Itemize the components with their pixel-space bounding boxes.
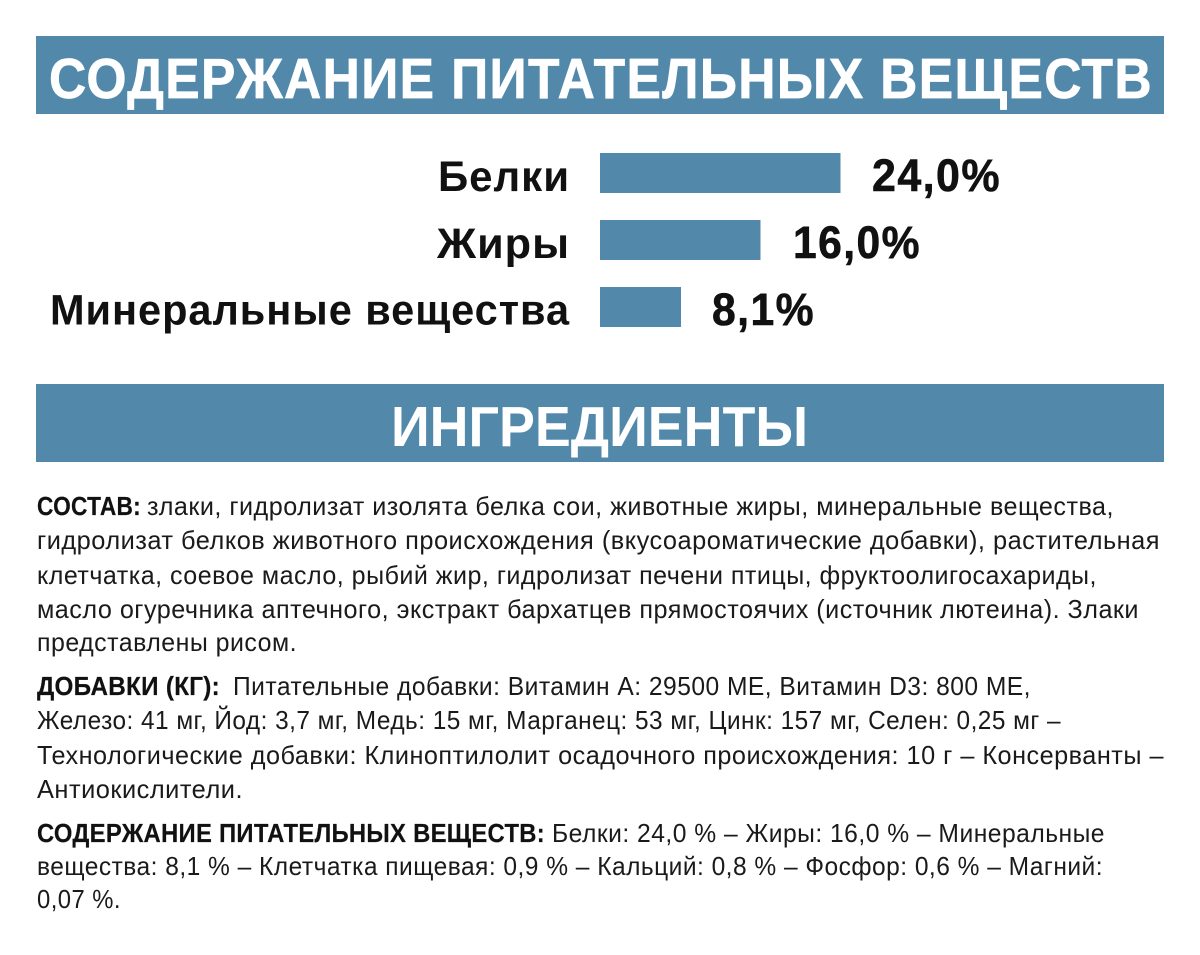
- text block: nutrient details: Белки: 24,0 % – Жиры: 16,0 % – Минеральные: [552, 818, 1105, 848]
- text block: additives: Питательные добавки: Витамин А: 29500 МЕ, Витамин D3: 800 МЕ,: [233, 671, 1031, 701]
- text block: composition: гидролизат белков животного происхождения (вкусоароматические добавки), растительная: [37, 525, 1160, 555]
- text block: composition: масло огуречника аптечного, экстракт бархатцев прямостоячих (источник лютеина). Злаки: [37, 594, 1139, 624]
- text block: additives: Антиокислители.: [37, 774, 243, 804]
- text block: additives: ДОБАВКИ (КГ):: [37, 671, 220, 701]
- bar chart: nutrients: [50, 150, 1001, 335]
- row: fats: Жиры: [436, 220, 570, 268]
- row: proteins: [438, 150, 1001, 201]
- heading: ingredients: ИНГРЕДИЕНТЫ: [391, 395, 808, 459]
- row: minerals: 8,1%: [712, 284, 815, 335]
- text block: composition: злаки, гидролизат изолята белка сои, животные жиры, минеральные вещества,: [147, 491, 1114, 521]
- row: minerals: Минеральные вещества: [50, 286, 570, 334]
- row: proteins: 24,0%: [872, 150, 1001, 201]
- row: minerals: [50, 284, 815, 335]
- text block: nutrient details: [37, 818, 1105, 914]
- text block: additives: [37, 671, 1164, 804]
- text block: nutrient details: 0,07 %.: [37, 884, 121, 914]
- text block: composition: клетчатка, соевое масло, рыбий жир, гидролизат печени птицы, фруктоолигосахариды,: [37, 560, 1097, 590]
- text block: composition: СОСТАВ:: [37, 491, 141, 521]
- text block: nutrient details: СОДЕРЖАНИЕ ПИТАТЕЛЬНЫХ ВЕЩЕСТВ:: [37, 818, 545, 848]
- text block: additives: Технологические добавки: Клиноптилолит осадочного происхождения: 10 г – Консерванты –: [37, 740, 1164, 770]
- text block: composition: представлены рисом.: [37, 627, 297, 657]
- heading: ingredients: [36, 384, 1164, 462]
- text block: nutrient details: вещества: 8,1 % – Клетчатка пищевая: 0,9 % – Кальций: 0,8 % – Фосфор: 0,6 % – Магний:: [37, 851, 1103, 881]
- text block: composition: [37, 491, 1160, 657]
- row: proteins: Белки: [438, 153, 570, 201]
- text block: additives: Железо: 41 мг, Йод: 3,7 мг, Медь: 15 мг, Марганец: 53 мг, Цинк: 157 мг, Селен: 0,25 мг –: [37, 705, 1061, 735]
- row: fats: 16,0%: [793, 217, 921, 268]
- row: fats: [436, 217, 921, 268]
